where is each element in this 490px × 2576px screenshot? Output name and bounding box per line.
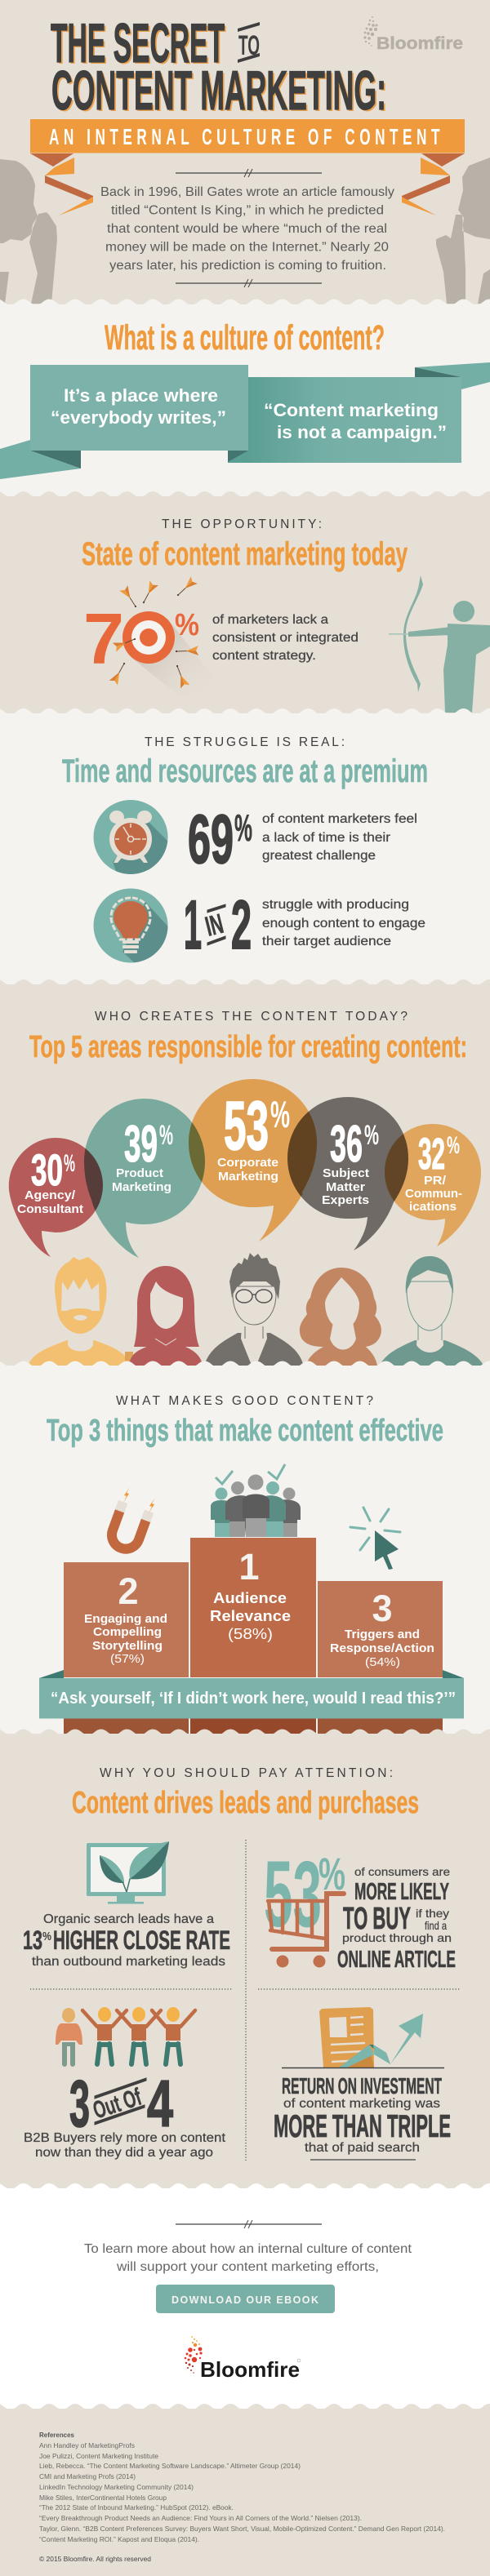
text: more likely to buy [337,1865,456,1973]
reference list: “Every Breakthrough Product Needs an Audience: Find Yours in All Corners of the World.” Nielsen (2013). [39,2514,362,2522]
stat: agency 30 percent: 30 [31,1146,63,1195]
kicker: WHAT MAKES GOOD CONTENT? [116,1394,373,1408]
podium: third place [318,1581,443,1735]
reference list: CMI and Marketing Profs (2014) [39,2472,136,2481]
text: more likely to buy: if they [416,1907,449,1920]
stat: 3 out of 4: 3 [69,2067,90,2141]
text: lack of time: greatest challenge [262,849,376,863]
stat: agency 30 percent: % [64,1150,75,1177]
reference list: Lieb, Rebecca. “The Content Marketing Software Landscape.” Altimeter Group (2014) [39,2462,301,2470]
title: THE SECRET [51,12,225,74]
reference list: Joe Pulizzi, Content Marketing Institute [39,2452,158,2460]
text: more likely to buy: product through an [342,1931,452,1944]
stat: 1 in 2: IN [203,908,226,943]
reference list: “Content Marketing ROI.” Kapost and Eloqua (2014). [39,2535,199,2543]
call to action text [84,2242,412,2274]
stat: 3 out of 4: 4 [147,2067,173,2141]
podium: second place: Storytelling [92,1639,163,1653]
stat: subject matter experts 36 percent: Subject [323,1166,369,1180]
text: higher close rate [23,1912,230,1969]
podium: first place: Audience [213,1590,287,1606]
intro paragraph: that content would be where “much of the real [107,222,387,236]
reference list: “The 2012 State of Inbound Marketing.” HubSpot (2012). eBook. [39,2503,234,2512]
title [51,12,388,123]
icon: shopping cart with 53 percent: 53 [264,1842,322,1947]
logo: Bloomfire grey: Bloomfire [376,34,463,53]
podium: third place: Triggers and [345,1628,420,1641]
logo: Bloomfire grey [363,16,463,53]
icon: magnet [104,1487,155,1554]
podium: third place: Response/Action [330,1641,434,1655]
podium: second place: (57%) [110,1652,145,1666]
podium: first place [190,1538,316,1735]
person: man with glasses [203,1253,305,1371]
text: struggle with producing: their target audience [262,935,391,948]
text: marketers lack strategy: consistent or integrated [212,631,359,645]
panel: who creates the content [0,979,490,1371]
kicker: WHY YOU SHOULD PAY ATTENTION: [100,1766,393,1780]
podium: third place: (54%) [365,1655,400,1669]
divider [176,2220,322,2228]
quote band [39,1670,464,1719]
text: return on investment [274,2073,451,2160]
reference list: LinkedIn Technology Marketing Community (2014) [39,2483,194,2491]
reference list: Taylor, Glenn. “B2B Content Preferences Survey: Buyers Want Short, Visual, Mobile-Optimized Content.” Demand Gen Report (2014). [39,2525,445,2533]
ribbon right: “Content marketing [264,400,439,420]
stat: product marketing 39 percent: 39 [124,1116,158,1173]
text: marketers lack strategy [212,613,359,663]
icon: archer [389,575,490,713]
text: return on investment: that of paid search [305,2141,420,2155]
podium: first place: (58%) [228,1626,273,1642]
ribbon left: It’s a place where [64,385,218,406]
podium: third place: 3 [372,1588,393,1629]
call to action text: will support your content marketing efforts, [116,2260,379,2274]
stat: agency 30 percent [17,1146,83,1216]
icon: cursor click [350,1508,400,1570]
references heading: References [39,2431,74,2439]
stat: corporate marketing 53 percent: Corporate [217,1156,278,1170]
stat: subject matter experts 36 percent: 36 [330,1116,363,1173]
kicker: WHO CREATES THE CONTENT TODAY? [95,1010,408,1024]
panel: why you should pay attention [0,1729,490,2189]
podium: first place: Relevance [210,1608,291,1624]
speech bubbles [9,1079,481,1258]
podium: second place: Compelling [93,1625,162,1639]
reference list [39,2441,445,2543]
text: lack of time [262,812,417,863]
stat: subject matter experts 36 percent: % [364,1120,379,1151]
text: higher close rate: Organic search leads have a [43,1912,214,1926]
stat: subject matter experts 36 percent: Experts [322,1193,369,1207]
text: struggle with producing: enough content to engage [262,917,425,930]
stat: agency 30 percent: Consultant [17,1202,83,1216]
stat: 70 percent target: % [175,608,199,642]
stat: subject matter experts 36 percent: Matter [326,1180,365,1194]
stat: subject matter experts 36 percent [322,1116,379,1207]
podium: second place [64,1562,189,1735]
panel: header background [0,0,490,304]
stat: product marketing 39 percent: Marketing [112,1180,172,1194]
logo: Bloomfire colour: Bloomfire [200,2357,300,2382]
subtitle banner [30,119,465,153]
icon: shopping cart with 53 percent [264,1842,345,1967]
stat: 1 in 2: 1 [184,886,202,963]
stat: PR communications 32 percent [405,1130,462,1214]
text: higher close rate: than outbound marketing leads [32,1955,225,1969]
text: marketers lack strategy: of marketers lack a [212,613,328,627]
quote band: “Ask yourself, ‘If I didn’t work here, would I read this?’” [51,1690,456,1708]
silhouette: left person whispering [0,159,57,304]
ribbon tail: left [30,153,93,215]
icon: shopping cart with 53 percent: % [318,1848,345,1899]
text: lack of time: of content marketers feel [262,812,417,826]
icon: monitor with leaves [87,1841,169,1903]
stat: corporate marketing 53 percent [217,1087,290,1184]
icon: alarm clock [93,800,168,874]
podium: second place: 2 [118,1570,139,1612]
ribbon tail: right [402,153,465,215]
stat: product marketing 39 percent [112,1116,173,1194]
person: bearded man [27,1257,133,1371]
ribbon right: is not a campaign.” [277,422,447,442]
stat: 1 in 2: 2 [231,886,252,963]
text: return on investment: of content marketing was [283,2097,440,2111]
person: woman red hair [128,1266,203,1371]
ribbon right [228,362,490,463]
text: higher close rate: % [42,1930,51,1943]
panel: header [0,12,490,304]
stat: product marketing 39 percent: % [159,1120,173,1151]
text: more likely to buy: of consumers are [354,1865,450,1878]
text: more likely to buy: find a [425,1919,447,1932]
kicker: THE OPPORTUNITY: [162,517,322,531]
text: lack of time: a lack of time is their [262,831,390,845]
text: B2B buyers [24,2131,226,2160]
stat: 70 percent target: 7 [83,598,124,679]
intro paragraph [100,185,394,273]
ribbon left: “everybody writes,” [51,407,226,428]
stat: corporate marketing 53 percent: 53 [224,1087,269,1164]
reference list: Mike Stiles, InterContinental Hotels Group [39,2494,167,2502]
intro paragraph: titled “Content Is King,” in which he predicted [111,204,384,217]
stat: 3 out of 4: Out Of [90,2084,145,2125]
kicker: THE STRUGGLE IS REAL: [145,735,345,749]
stat: 3 out of 4 [69,2067,173,2141]
grid dividers [30,1840,461,2161]
person: man teal [378,1256,486,1371]
stat: product marketing 39 percent: Product [116,1166,163,1180]
text: B2B buyers: B2B Buyers rely more on content [24,2131,226,2145]
text: B2B buyers: now than they did a year ago [35,2146,213,2160]
copyright: © 2015 Bloomfire. All rights reserved [39,2555,151,2563]
reference list: Ann Handley of MarketingProfs [39,2441,135,2449]
text: more likely to buy: TO BUY [343,1902,411,1936]
panel: the opportunity [0,491,490,713]
stat: agency 30 percent: Agency/ [24,1188,76,1202]
icon: light bulb [93,888,168,963]
podium: first place: 1 [238,1546,260,1588]
ribbon left [0,365,248,479]
stat: 69 percent: % [234,806,252,849]
intro paragraph: years later, his prediction is coming to fruition. [109,259,386,273]
stat: 69 percent: 69 [188,801,234,877]
intro paragraph: Back in 1996, Bill Gates wrote an article famously [100,185,394,199]
panel: call to action [0,2183,490,2410]
logo: Bloomfire colour [185,2336,301,2382]
text: higher close rate: HIGHER CLOSE RATE [53,1925,230,1955]
stat: corporate marketing 53 percent: Marketing [218,1170,278,1184]
text: struggle with producing [262,898,425,948]
podium: second place: Engaging and [84,1612,167,1626]
button: download [156,2285,335,2313]
stat: 1 in 2 [184,886,252,963]
title: THE SECRET [52,14,226,76]
button: download: DOWNLOAD OUR EBOOK [172,2294,318,2306]
text: struggle with producing: struggle with producing [262,898,409,912]
panel: what makes good content [0,1361,490,1735]
person: woman curly hair [300,1268,381,1371]
stat: PR communications 32 percent: PR/ [424,1174,447,1188]
stat: PR communications 32 percent: 32 [418,1130,445,1179]
stat: 70 percent target [83,576,214,700]
panel: the struggle is real [0,708,490,984]
stat: PR communications 32 percent: Commun- [405,1187,462,1201]
divider bottom [176,279,322,287]
icon: audience group [211,1464,301,1537]
intro paragraph: money will be made on the Internet.” Nearly 20 [105,240,389,255]
icon: group of four people [56,2007,195,2064]
divider top [176,169,322,177]
text: higher close rate: 13 [23,1925,42,1955]
text: marketers lack strategy: content strategy. [212,649,316,663]
silhouette: right person shushing [436,158,490,304]
icon: document with rising arrow [282,2007,444,2068]
panel: what is a culture of content [0,299,490,497]
stat: corporate marketing 53 percent: % [270,1093,290,1135]
stat: PR communications 32 percent: % [447,1132,460,1159]
call to action text: To learn more about how an internal culture of content [84,2242,412,2256]
title: TO [238,30,260,61]
stat: PR communications 32 percent: ications [409,1200,457,1214]
panel: references [0,2404,490,2576]
